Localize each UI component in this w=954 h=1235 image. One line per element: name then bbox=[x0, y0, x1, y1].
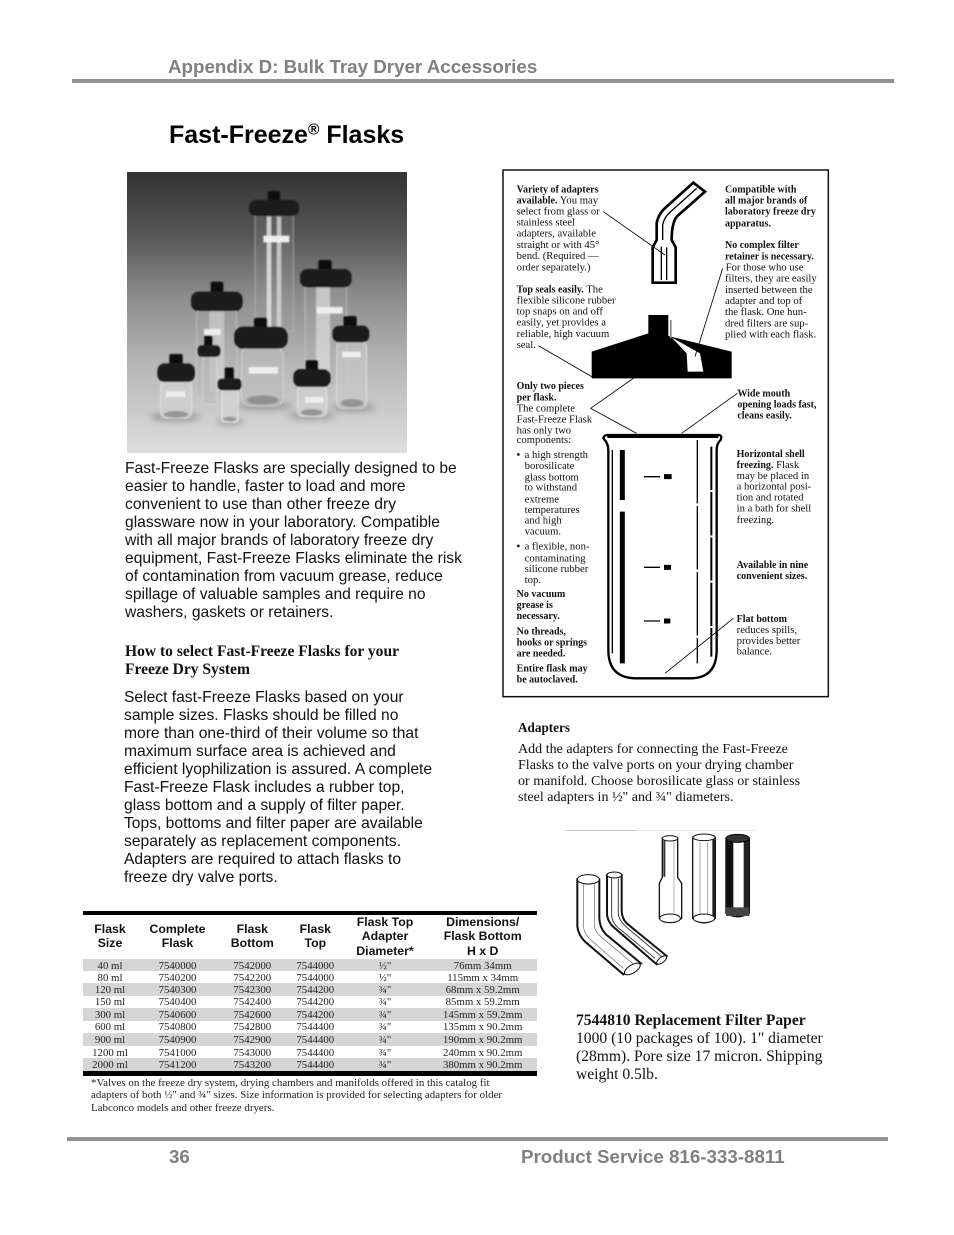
callout: no grease, threads, autoclave: hooks or springs bbox=[517, 638, 587, 649]
text block: introduction: convenient to use than other freeze dry bbox=[125, 496, 396, 513]
table: flask sizes and part numbers: 7543200 bbox=[233, 1059, 271, 1071]
table: flask sizes and part numbers: 7544400 bbox=[296, 1021, 334, 1033]
table: flask sizes and part numbers: 68mm x 59.2mm bbox=[446, 984, 520, 996]
callout: two pieces: and high bbox=[525, 516, 562, 527]
callout: nine sizes bbox=[737, 560, 809, 582]
table: flask sizes and part numbers: 7542400 bbox=[233, 996, 271, 1008]
text block: introduction: equipment, Fast-Freeze Flasks eliminate the risk bbox=[125, 550, 462, 567]
callout: top seals: Top seals easily. The bbox=[517, 285, 603, 296]
text block: introduction: easier to handle, faster to load and more bbox=[125, 478, 406, 495]
callout: top seals: flexible silicone rubber bbox=[517, 296, 616, 307]
footnote: adapters of both ½" and ¾" sizes. Size information is provided for selecting adapters for older bbox=[91, 1089, 502, 1101]
heading: how to select flasks: Freeze Dry System bbox=[125, 661, 250, 678]
table: flask sizes and part numbers: Flask bbox=[162, 936, 193, 950]
table: flask sizes and part numbers: 7541000 bbox=[159, 1047, 196, 1059]
callout: adapters: straight or with 45° bbox=[517, 240, 599, 251]
callout: wide mouth: cleans easily. bbox=[737, 411, 792, 422]
table: flask sizes and part numbers: 2000 ml bbox=[92, 1059, 128, 1071]
heading: how to select flasks: How to select Fast-Freeze Flasks for your bbox=[125, 643, 399, 660]
footer rule bbox=[67, 1137, 888, 1141]
table: flask sizes and part numbers: 240mm x 90.2mm bbox=[443, 1047, 522, 1059]
callout: two pieces: glass bottom bbox=[525, 472, 580, 483]
table: flask sizes and part numbers: Dimensions/ bbox=[446, 915, 519, 929]
callout: top seals: easily, yet provides a bbox=[517, 318, 606, 329]
table: flask sizes and part numbers: Flask Top bbox=[357, 915, 413, 929]
text block: introduction: Fast-Freeze Flasks are specially designed to be bbox=[125, 460, 457, 477]
title: Fast-Freeze® Flasks bbox=[169, 120, 404, 148]
text block: introduction: glassware now in your laboratory. Compatible bbox=[125, 514, 440, 531]
callout: two pieces: extreme bbox=[525, 494, 559, 505]
callout: horizontal shell freezing: a horizontal posi- bbox=[737, 482, 812, 493]
table: flask sizes and part numbers: 7544000 bbox=[296, 960, 334, 972]
table: flask sizes and part numbers: Bottom bbox=[231, 936, 274, 950]
table: flask sizes and part numbers: Flask bbox=[300, 922, 331, 936]
flask: left tall bbox=[191, 282, 243, 397]
callout: two pieces: per flask. bbox=[517, 392, 557, 403]
table: flask sizes and part numbers: 7540600 bbox=[159, 1009, 196, 1021]
flask: tiny bbox=[217, 367, 242, 422]
text block: replacement filter paper: 7544810 Replacement Filter Paper bbox=[576, 1012, 806, 1029]
callout: two pieces: has only two bbox=[517, 425, 571, 436]
text block: introduction: washers, gaskets or retainers. bbox=[125, 604, 333, 621]
callout: no grease, threads, autoclave: No vacuum bbox=[517, 589, 566, 600]
callout: adapters: select from glass or bbox=[517, 207, 600, 218]
callout: no filter retainer: inserted between the bbox=[725, 285, 813, 296]
callout: wide mouth bbox=[737, 388, 817, 422]
callout: wide mouth: opening loads fast, bbox=[737, 400, 817, 411]
callout: adapters: stainless steel bbox=[517, 218, 575, 229]
flask: centre bbox=[234, 318, 288, 406]
table: flask sizes and part numbers: 7542600 bbox=[233, 1009, 271, 1021]
footnote: Labconco models and other freeze dryers. bbox=[91, 1102, 274, 1114]
table: flask sizes and part numbers: 145mm x 59.2mm bbox=[443, 1009, 522, 1021]
table: flask sizes and part numbers: H x D bbox=[467, 944, 498, 958]
text block: adapters: or manifold. Choose borosilicate glass or stainless bbox=[518, 773, 800, 789]
callout: horizontal shell freezing: freezing. bbox=[737, 515, 774, 526]
callout: two pieces: temperatures bbox=[525, 505, 580, 516]
callout: no grease, threads, autoclave: necessary. bbox=[517, 611, 560, 622]
table: flask sizes and part numbers: Adapter bbox=[362, 929, 408, 943]
callout: two pieces: silicone rubber bbox=[525, 564, 589, 575]
text block: replacement filter paper: weight 0.5lb. bbox=[576, 1066, 658, 1083]
callout: horizontal shell freezing: tion and rotated bbox=[737, 493, 804, 504]
text block: adapters bbox=[518, 720, 800, 805]
table: flask sizes and part numbers: Size bbox=[98, 936, 122, 950]
callout: adapters: adapters, available bbox=[517, 229, 596, 240]
table: flask sizes and part numbers: Diameter* bbox=[356, 944, 414, 958]
callout: two pieces: top. bbox=[525, 575, 541, 586]
text block: selection guidance: glass bottom and a supply of filter paper. bbox=[124, 797, 405, 814]
text block: selection guidance bbox=[124, 689, 432, 886]
text block: replacement filter paper: (28mm). Pore size 17 micron. Shipping bbox=[576, 1048, 822, 1065]
table: flask sizes and part numbers: Flask bbox=[94, 922, 126, 936]
callout: adapters: bend. (Required — bbox=[517, 251, 599, 262]
callout: two pieces: a high strength bbox=[525, 450, 589, 461]
photo: group of Fast-Freeze flasks bbox=[127, 172, 407, 453]
table: flask sizes and part numbers: 190mm x 90.2mm bbox=[443, 1034, 522, 1046]
callout: compatible: Compatible with bbox=[725, 184, 797, 195]
text block: replacement filter paper: 1000 (10 packages of 100). 1" diameter bbox=[576, 1030, 823, 1047]
callout: compatible bbox=[725, 184, 816, 229]
callout: horizontal shell freezing: Horizontal shell bbox=[737, 449, 805, 460]
callout: two pieces: to withstand bbox=[525, 483, 578, 494]
table: flask sizes and part numbers: ½" bbox=[379, 960, 391, 972]
callout: two pieces: a flexible, non- bbox=[525, 542, 590, 553]
table: flask sizes and part numbers: 7542300 bbox=[233, 984, 271, 996]
text block: replacement filter paper bbox=[576, 1012, 823, 1083]
callout: horizontal shell freezing: in a bath for shell bbox=[737, 504, 811, 515]
callout: no grease, threads, autoclave: Entire flask may bbox=[517, 664, 588, 675]
header rule bbox=[72, 79, 894, 83]
table: flask sizes and part numbers: 7540000 bbox=[159, 960, 196, 972]
table: flask sizes and part numbers: 7540200 bbox=[159, 972, 196, 984]
callout: adapters: Variety of adapters bbox=[517, 184, 599, 195]
callout: no filter retainer: dred filters are sup- bbox=[725, 318, 809, 329]
table: flask sizes and part numbers: ¾" bbox=[379, 1021, 391, 1033]
text block: introduction: of contamination from vacuum grease, reduce bbox=[125, 568, 443, 585]
callout: no filter retainer: plied with each flask. bbox=[725, 329, 816, 340]
callout: no grease, threads, autoclave: are needed. bbox=[517, 648, 566, 659]
text block: selection guidance: efficient lyophilization is assured. A complete bbox=[124, 761, 432, 778]
callout: compatible: apparatus. bbox=[725, 218, 771, 229]
callout: two pieces: • bbox=[517, 450, 521, 461]
adapter: straight clear bbox=[693, 834, 715, 923]
callout: no filter retainer: No complex filter bbox=[725, 240, 799, 251]
text block: selection guidance: Fast-Freeze Flask includes a rubber top, bbox=[124, 779, 405, 796]
flask: bottom right bbox=[293, 360, 331, 417]
callout: two pieces: The complete bbox=[517, 403, 575, 414]
table: flask sizes and part numbers: 7542200 bbox=[233, 972, 271, 984]
text block: adapters: steel adapters in ½" and ¾" diameters. bbox=[518, 789, 733, 805]
text block: selection guidance: Select fast-Freeze Flasks based on your bbox=[124, 689, 404, 706]
callout: adapters: available. You may bbox=[517, 196, 599, 207]
callout: no filter retainer: the flask. One hun- bbox=[725, 307, 807, 318]
table: flask sizes and part numbers: 7540900 bbox=[159, 1034, 196, 1046]
table: flask sizes and part numbers: ¾" bbox=[379, 996, 391, 1008]
footer: page number: 36 bbox=[169, 1146, 190, 1167]
table: flask sizes and part numbers: ¾" bbox=[379, 1047, 391, 1059]
callout: nine sizes: convenient sizes. bbox=[737, 571, 808, 582]
callout: horizontal shell freezing bbox=[737, 449, 812, 526]
flask: right tall bbox=[300, 260, 352, 385]
diagram frame bbox=[503, 170, 828, 697]
flask: right medium bbox=[332, 316, 369, 408]
callout: wide mouth: Wide mouth bbox=[737, 388, 791, 399]
text block: selection guidance: Adapters are required to attach flasks to bbox=[124, 851, 401, 868]
callout: no grease, threads, autoclave: No threads, bbox=[517, 627, 566, 638]
callout: no filter retainer bbox=[725, 240, 817, 340]
flask: tallest bbox=[249, 191, 299, 332]
table: flask sizes and part numbers: Flask bbox=[237, 922, 268, 936]
table: flask sizes and part numbers: 135mm x 90.2mm bbox=[443, 1021, 522, 1033]
adapter: large bent bbox=[577, 875, 642, 977]
callout: no filter retainer: For those who use bbox=[726, 263, 804, 274]
callout: no grease, threads, autoclave: be autoclaved. bbox=[517, 674, 578, 685]
text block: selection guidance: Tops, bottoms and filter paper are available bbox=[124, 815, 423, 832]
callout: horizontal shell freezing: may be placed in bbox=[737, 471, 810, 482]
table: flask sizes and part numbers: 380mm x 90.2mm bbox=[443, 1059, 522, 1071]
icon: bent adapter bbox=[653, 183, 705, 283]
callout: adapters bbox=[517, 184, 600, 273]
adapter: straight with flange bbox=[659, 836, 682, 923]
table: flask sizes and part numbers: 85mm x 59.2mm bbox=[446, 996, 520, 1008]
callout: compatible: all major brands of bbox=[725, 196, 808, 207]
text block: selection guidance: freeze dry valve ports. bbox=[124, 869, 278, 886]
callout: two pieces bbox=[517, 381, 593, 586]
table: flask sizes and part numbers: 40 ml bbox=[98, 960, 122, 972]
table: flask sizes and part numbers: 1200 ml bbox=[92, 1047, 128, 1059]
text block: introduction: spillage of valuable samples and require no bbox=[125, 586, 426, 603]
table: flask sizes and part numbers: 900 ml bbox=[95, 1034, 125, 1046]
callout: two pieces: components: bbox=[517, 435, 571, 446]
table: flask sizes and part numbers: 7544400 bbox=[296, 1034, 334, 1046]
footnote bbox=[91, 1076, 502, 1114]
text block: adapters: Adapters bbox=[518, 720, 570, 735]
callout: top seals: top snaps on and off bbox=[517, 307, 603, 318]
icon: glass flask body bbox=[603, 435, 721, 678]
text block: introduction bbox=[125, 460, 462, 621]
heading: how to select flasks bbox=[125, 643, 399, 678]
callout: flat bottom bbox=[737, 614, 801, 658]
table: flask sizes and part numbers: 76mm 34mm bbox=[454, 960, 512, 972]
callout: no grease, threads, autoclave bbox=[517, 589, 588, 685]
table: flask sizes and part numbers: 7544200 bbox=[296, 984, 334, 996]
table: flask sizes and part numbers: Top bbox=[304, 936, 326, 950]
callout: top seals: reliable, high vacuum bbox=[517, 329, 610, 340]
table: flask sizes and part numbers: 7540400 bbox=[159, 996, 196, 1008]
table: flask sizes and part numbers: 115mm x 34mm bbox=[447, 972, 518, 984]
callout: flat bottom: provides better bbox=[737, 636, 801, 647]
callout: flat bottom: Flat bottom bbox=[737, 614, 788, 625]
callout: no filter retainer: adapter and top of bbox=[725, 296, 803, 307]
text block: selection guidance: sample sizes. Flasks should be filled no bbox=[124, 707, 398, 724]
floor shadows bbox=[150, 402, 375, 424]
callout: adapters: order separately.) bbox=[517, 262, 591, 273]
table: flask sizes and part numbers: 7540300 bbox=[159, 984, 196, 996]
table: flask sizes and part numbers: ½" bbox=[379, 972, 391, 984]
text block: adapters: Flasks to the valve ports on your drying chamber bbox=[518, 757, 793, 773]
callout: two pieces: contaminating bbox=[525, 553, 586, 564]
callout: compatible: laboratory freeze dry bbox=[725, 207, 816, 218]
table: flask sizes and part numbers: 80 ml bbox=[98, 972, 122, 984]
table: flask sizes and part numbers: ¾" bbox=[379, 984, 391, 996]
table: flask sizes and part numbers: 7543000 bbox=[233, 1047, 271, 1059]
callout: two pieces: Fast-Freeze Flask bbox=[517, 414, 593, 425]
callout: flat bottom: balance. bbox=[737, 647, 772, 658]
flask: bottom left bbox=[157, 354, 195, 418]
table: flask sizes and part numbers: 7544200 bbox=[296, 1009, 334, 1021]
text block: adapters: Add the adapters for connecting the Fast-Freeze bbox=[518, 741, 788, 757]
callout: horizontal shell freezing: freezing. Flask bbox=[737, 460, 800, 471]
table: flask sizes and part numbers: 7541200 bbox=[159, 1059, 196, 1071]
footer: product service phone: Product Service 816-333-8811 bbox=[521, 1146, 785, 1167]
table: flask sizes and part numbers: 7544400 bbox=[296, 1059, 334, 1071]
table: flask sizes and part numbers: 7544200 bbox=[296, 996, 334, 1008]
table: flask sizes and part numbers: 150 ml bbox=[95, 996, 125, 1008]
text block: selection guidance: separately as replacement components. bbox=[124, 833, 401, 850]
adapter: small bent bbox=[607, 872, 668, 966]
table: flask sizes and part numbers: ¾" bbox=[379, 1059, 391, 1071]
table: flask sizes and part numbers: Complete bbox=[149, 922, 206, 936]
table: flask sizes and part numbers: ¾" bbox=[379, 1009, 391, 1021]
header: section title: Appendix D: Bulk Tray Dryer Accessories bbox=[168, 56, 537, 77]
text block: introduction: with all major brands of laboratory freeze dry bbox=[125, 532, 433, 549]
callout: top seals bbox=[517, 285, 616, 351]
callout: two pieces: borosilicate bbox=[525, 461, 575, 472]
callout: flat bottom: reduces spills, bbox=[737, 625, 797, 636]
table: flask sizes and part numbers bbox=[83, 911, 537, 1076]
callout: nine sizes: Available in nine bbox=[737, 560, 809, 571]
footnote: *Valves on the freeze dry system, drying chambers and manifolds offered in this catalog fit bbox=[91, 1076, 490, 1088]
leader lines bbox=[538, 212, 737, 673]
table: flask sizes and part numbers: 7544000 bbox=[296, 972, 334, 984]
table: flask sizes and part numbers: 300 ml bbox=[95, 1009, 125, 1021]
table: flask sizes and part numbers: 7544400 bbox=[296, 1047, 334, 1059]
diagram: annotated flask features bbox=[502, 169, 830, 698]
callout: top seals: seal. bbox=[517, 340, 536, 351]
table: flask sizes and part numbers: 120 ml bbox=[95, 984, 125, 996]
table: flask sizes and part numbers: 7540800 bbox=[159, 1021, 196, 1033]
callout: two pieces: • bbox=[517, 542, 521, 553]
callout: no filter retainer: retainer is necessary. bbox=[725, 252, 814, 263]
flask: small behind bbox=[197, 336, 221, 404]
text block: selection guidance: more than one-third of their volume so that bbox=[124, 725, 418, 742]
adapter: stainless steel bbox=[726, 834, 749, 917]
table: flask sizes and part numbers: 7542900 bbox=[233, 1034, 271, 1046]
icon: flask top bbox=[592, 315, 732, 378]
callout: two pieces: vacuum. bbox=[525, 527, 561, 538]
table: flask sizes and part numbers: 7542000 bbox=[233, 960, 271, 972]
text block: selection guidance: maximum surface area is achieved and bbox=[124, 743, 396, 760]
callout: no filter retainer: filters, they are easily bbox=[725, 274, 817, 285]
table: flask sizes and part numbers: 7542800 bbox=[233, 1021, 271, 1033]
illustration: glass and steel adapters bbox=[565, 830, 755, 976]
callout: no grease, threads, autoclave: grease is bbox=[517, 600, 553, 611]
callout: two pieces: Only two pieces bbox=[517, 381, 584, 392]
table: flask sizes and part numbers: Flask Bottom bbox=[444, 929, 522, 943]
table: flask sizes and part numbers: ¾" bbox=[379, 1034, 391, 1046]
table: flask sizes and part numbers: 600 ml bbox=[95, 1021, 125, 1033]
